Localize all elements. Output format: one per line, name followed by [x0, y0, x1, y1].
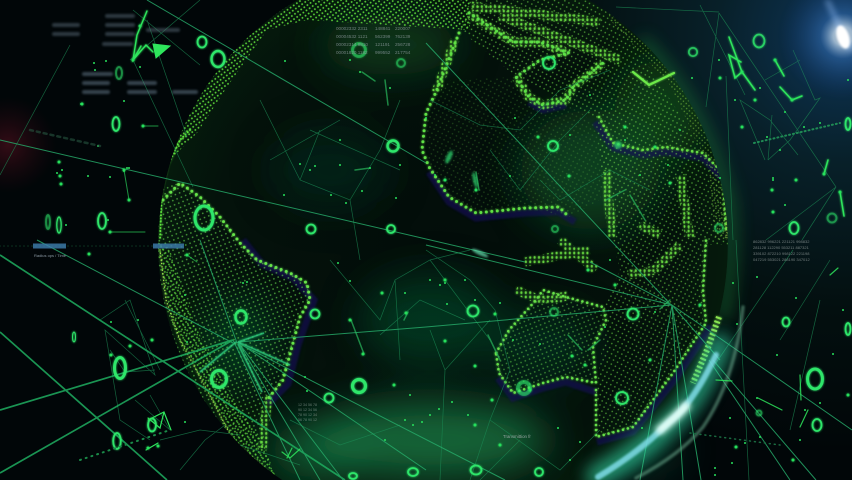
- line set: heavy lower-left diagonals: [0, 255, 345, 480]
- hud data table, top centre: 121191: [375, 42, 390, 47]
- transmission label: Transmittion fr: [503, 434, 531, 439]
- segments: globe dim: [351, 72, 670, 360]
- coast: upper left bright: [160, 130, 190, 240]
- outer edge bright band, lower right: [693, 317, 719, 383]
- hud mini grid, lower centre: 56 78 90 12: [298, 418, 317, 422]
- land dot texture: Africa oval: [426, 77, 613, 217]
- hud data table, top centre: 256728: [395, 42, 411, 47]
- lower flare arcs: [598, 307, 743, 478]
- coast: top right edge: [725, 210, 728, 239]
- coast: north Africa: [422, 33, 569, 217]
- hud data table, top centre: 148841: [375, 26, 391, 31]
- coast: left edge: [160, 250, 277, 479]
- globe glow, right side: [640, 40, 730, 320]
- hud data table, top centre: 220007: [395, 26, 411, 31]
- rim dotted band: upper left: [172, 0, 470, 156]
- flare: wide teal glow: [598, 345, 720, 476]
- line set: central hub A: [233, 305, 672, 480]
- tracer: lower left: [80, 430, 170, 460]
- caption: Radius ops / Time: [34, 253, 67, 258]
- hud pills, top left: [52, 14, 198, 94]
- coastlines: [160, 0, 727, 479]
- line set: central hub B: [426, 245, 852, 480]
- hud mini grid, lower centre: 90 12 34 56: [298, 408, 317, 412]
- land dot texture: Eurasia: [460, 0, 735, 437]
- hud blue bars: [33, 244, 184, 258]
- hud data table, top centre: 562399: [375, 34, 391, 39]
- arrow head top left: [153, 44, 170, 58]
- land dot texture: Australia: [496, 290, 606, 393]
- flare: blue band: [598, 355, 716, 477]
- rim dotted band: lower left: [155, 240, 277, 480]
- hud data table, top centre: [336, 26, 411, 55]
- coast: south America east: [163, 183, 310, 400]
- red lens tint: [0, 97, 56, 193]
- hud data grid, mid right: 047219 553021 288190 347012: [753, 257, 810, 262]
- tracer: mid left: [0, 245, 180, 247]
- coast: south Africa: [596, 240, 706, 437]
- hud mini grid, lower centre: [298, 403, 317, 422]
- hud data table, top centre: 762139: [395, 34, 411, 39]
- globe sphere body: [158, 0, 728, 480]
- haze beyond globe, lower right: [560, 422, 680, 478]
- hud mini grid, lower centre: 12 34 56 78: [298, 403, 317, 407]
- bright hub spokes: [200, 333, 290, 392]
- top right lens flare: [778, 0, 852, 101]
- hud data grid, mid right: 862832 996221 221121 998832: [753, 239, 810, 244]
- blue bar left: [33, 244, 66, 248]
- hud data table, top centre: 00002332 2311: [336, 26, 368, 31]
- tracer: faded left: [30, 130, 100, 146]
- flare: outer pale arc: [636, 307, 743, 478]
- hud mini grid, lower centre: 78 90 12 34: [298, 413, 317, 417]
- segments: upper right bright: [729, 37, 844, 216]
- hud data table, top centre: 999552: [375, 50, 391, 55]
- blue bar right: [153, 244, 184, 248]
- hud data table, top centre: 00004532 1121: [336, 34, 368, 39]
- land dot texture: South America: [150, 183, 310, 480]
- tracer: right: [754, 123, 840, 143]
- dotted horizontal tracer lines: [0, 123, 840, 460]
- ring group: dim: [46, 44, 836, 416]
- line set: long diagonals: [0, 0, 673, 343]
- hud data grid, mid right: 281128 112290 553211 887321: [753, 245, 810, 250]
- bright diagonal accent: [633, 72, 674, 85]
- segments: left dim: [110, 126, 197, 262]
- hud data table, top centre: 00002314 8810: [336, 42, 368, 47]
- segments: top-left bright: [133, 11, 153, 60]
- navy coast shadows: [243, 102, 722, 442]
- globe: [150, 0, 735, 480]
- flare: streak: [827, 0, 850, 50]
- thick dotted coast bands: [262, 6, 690, 450]
- hud data grid, mid right: [753, 239, 810, 262]
- segments: lower right: [282, 268, 838, 458]
- triangle lower left: [146, 412, 171, 450]
- rim dotted band: upper right: [606, 0, 729, 240]
- coast: Australia: [496, 290, 606, 393]
- flare: blue glow: [778, 0, 852, 101]
- large blurred nodes: [444, 141, 622, 259]
- hud data grid, mid right: 339102 872210 998122 221198: [753, 251, 810, 256]
- coast: Mediterranean: [469, 13, 603, 105]
- green haze clouds: [208, 15, 705, 478]
- coast: Arabia: [599, 117, 726, 233]
- flare: white core: [834, 24, 852, 50]
- flare: hot core: [660, 406, 686, 430]
- tracer: lower right: [690, 433, 780, 445]
- hud data table, top centre: 217754: [395, 50, 411, 55]
- hud data table, top centre: 00001820 1182: [336, 50, 368, 55]
